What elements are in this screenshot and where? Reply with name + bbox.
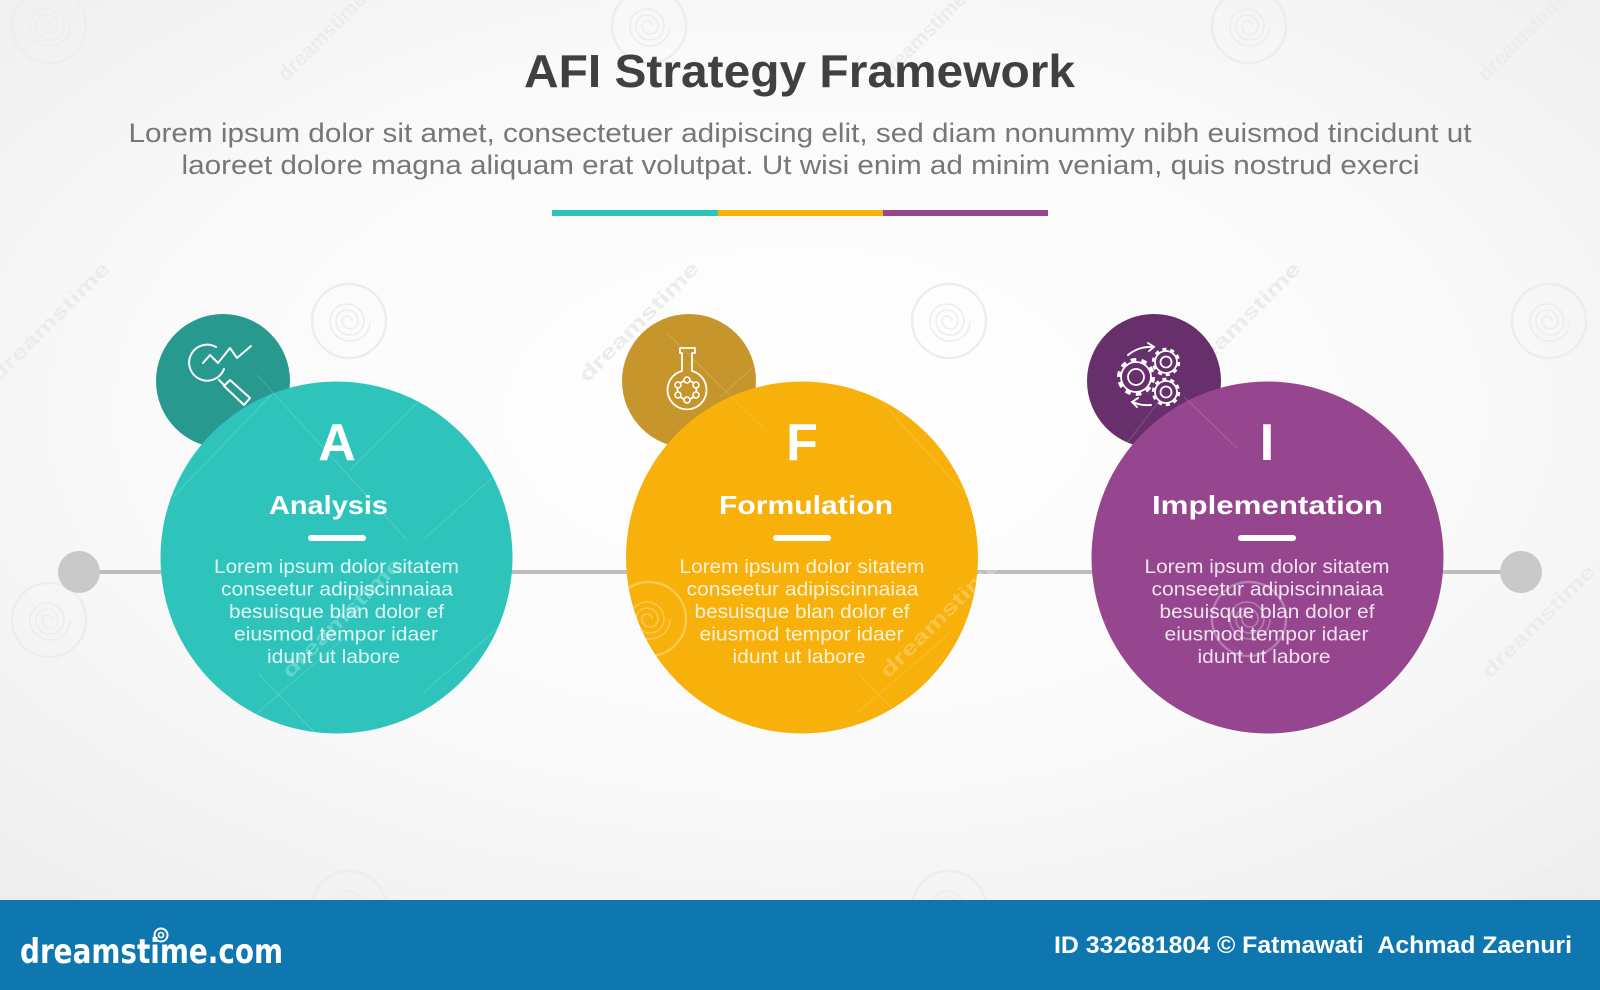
footer bar: [0, 900, 1600, 990]
body text: conseetur adipiscinnaiaa: [686, 578, 919, 600]
icon badge: analysis: [156, 314, 290, 448]
letter F: F: [786, 414, 818, 472]
heading: Implementation: Implementation: [1152, 490, 1383, 520]
body text: Lorem ipsum dolor sitatem: [1144, 556, 1390, 578]
timeline line with end dots: [58, 551, 1542, 593]
subtitle text: [128, 118, 1472, 180]
watermark overlay on circles: [173, 333, 1286, 735]
body text: idunt ut labore: [1198, 646, 1330, 668]
icon badge: formulation: [622, 314, 756, 448]
main circle: formulation: [626, 382, 978, 734]
body text: Lorem ipsum dolor sitatem: [214, 556, 459, 578]
body text: Lorem ipsum dolor sitatem: [680, 556, 924, 578]
body text: besuisque blan dolor ef: [694, 601, 910, 623]
letter A: A: [318, 414, 356, 472]
watermark text: dreamstime: [1177, 258, 1306, 387]
body text: [680, 556, 924, 668]
body text: eiusmod tempor idaer: [1164, 624, 1369, 646]
tricolor divider: [552, 210, 1048, 216]
title: AFI Strategy Framework: [524, 45, 1075, 97]
heading underline: [773, 535, 831, 541]
body text: eiusmod tempor idaer: [700, 624, 904, 646]
body text: [214, 556, 459, 668]
footer logo: dreamstime.com: [20, 932, 283, 972]
subtitle text: laoreet dolore magna aliquam erat volutpat. Ut wisi enim ad minim veniam, quis nostrud exerci: [182, 150, 1420, 180]
subtitle text: Lorem ipsum dolor sit amet, consectetuer adipiscing elit, sed diam nonummy nibh euismod tincidunt ut: [128, 118, 1472, 148]
letter I: I: [1260, 414, 1274, 472]
panel: implementation: [1087, 314, 1444, 734]
panel: analysis: [156, 314, 512, 734]
footer credit: ID 332681804 © Fatmawati Achmad Zaenuri: [1054, 932, 1572, 959]
body text: idunt ut labore: [267, 646, 400, 668]
icon badge: implementation: [1087, 314, 1221, 448]
body text: conseetur adipiscinnaiaa: [221, 578, 453, 600]
heading: Formulation: Formulation: [719, 490, 893, 520]
body text: besuisque blan dolor ef: [1160, 601, 1375, 623]
body text: besuisque blan dolor ef: [229, 601, 445, 623]
watermark overlay on circles: dreamstime: [876, 554, 1005, 683]
heading underline: [1238, 535, 1296, 541]
heading: Analysis: Analysis: [269, 490, 388, 520]
body text: idunt ut labore: [732, 646, 866, 668]
heading underline: [308, 535, 366, 541]
main circle: implementation: [1092, 382, 1444, 734]
body text: eiusmod tempor idaer: [234, 624, 439, 646]
body text: conseetur adipiscinnaiaa: [1152, 578, 1384, 600]
watermark text: dreamstime: [575, 258, 704, 387]
watermark overlay on circles: dreamstime: [278, 554, 407, 683]
panel: formulation: [622, 314, 978, 734]
watermark text: dreamstime: [1478, 561, 1600, 683]
watermark text: [0, 0, 1600, 683]
main circle: analysis: [160, 382, 512, 734]
body text: [1144, 556, 1390, 668]
